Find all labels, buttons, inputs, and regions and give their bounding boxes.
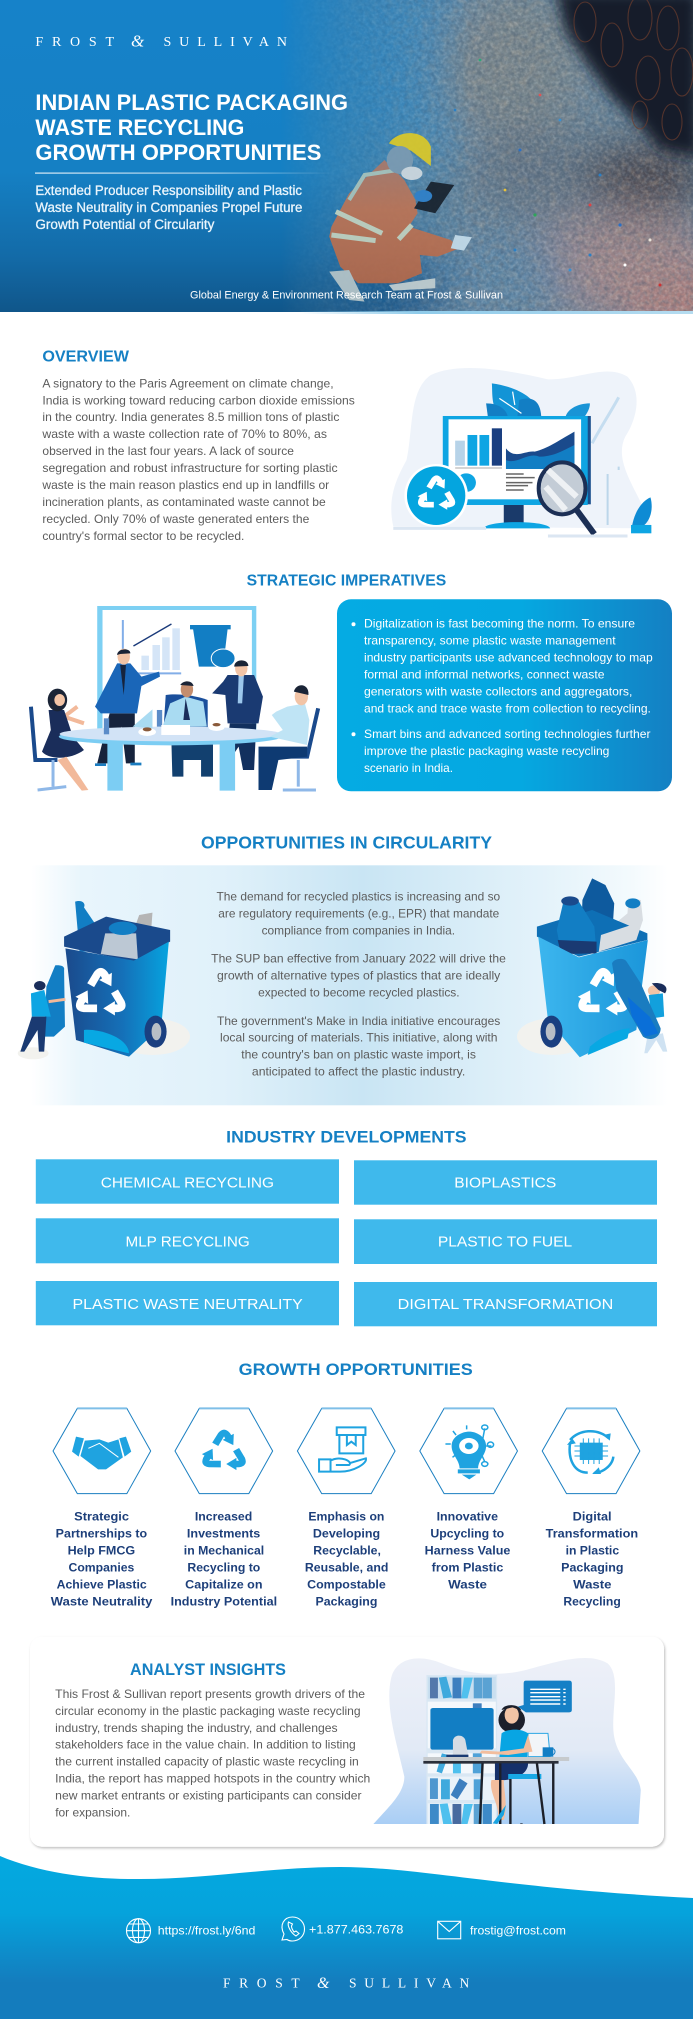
label: Developing: [313, 1527, 380, 1541]
subtitle: Growth Potential of Circularity: [35, 217, 215, 232]
overview body text: [41, 376, 355, 543]
icon: envelope: [438, 1921, 461, 1939]
panel: industry developments: [36, 1127, 657, 1326]
phone number: +1.877.463.7678: [309, 1923, 404, 1937]
icon: handshake in hexagon: [53, 1408, 151, 1494]
label: [546, 1510, 638, 1609]
panel: growth opportunities: [51, 1360, 640, 1609]
speech bubble: [518, 1681, 572, 1712]
panel: opportunities in circularity: [18, 833, 668, 1105]
label: from Plastic: [432, 1561, 504, 1575]
analyst body text: stakeholders face in the value chain. In addition to listing: [55, 1738, 356, 1752]
tile: chemical recycling: [36, 1159, 339, 1204]
label: Help FMCG: [68, 1544, 135, 1558]
desk and legs: [423, 1757, 569, 1761]
standing man right: [212, 660, 263, 770]
column: mechanical recycling: [171, 1408, 277, 1609]
callout panel with bullets: improve the plastic packaging waste recycling: [364, 744, 609, 758]
overview body text: country's formal sector to be recycled.: [42, 529, 244, 543]
research team credit: Global Energy & Environment Research Team at Frost & Sullivan: [190, 289, 503, 301]
analyst body text: new market entrants or existing participants can consider: [55, 1789, 362, 1803]
callout panel with bullets: scenario in India.: [364, 761, 453, 775]
subtitle: Extended Producer Responsibility and Plastic: [35, 183, 302, 198]
overview body text: observed in the last four years. A lack of source: [42, 444, 294, 458]
overview body text: waste with a waste collection rate of 70% to 80%, as: [41, 427, 327, 441]
heading: growth opportunities: GROWTH OPPORTUNITIES: [239, 1360, 473, 1379]
opportunities text: growth of alternative types of plastics that are ideally: [217, 969, 500, 983]
subtitle: Waste Neutrality in Companies Propel Future: [35, 200, 302, 215]
analyst body text: circular economy in the plastic packaging waste recycling: [55, 1704, 361, 1718]
logo: footer Frost & Sullivan: &: [317, 1975, 330, 1992]
tile: plastic to fuel: PLASTIC TO FUEL: [438, 1234, 572, 1251]
coloured bottle caps: [454, 59, 662, 286]
recycle badge: [404, 464, 468, 527]
monitor: [504, 505, 524, 527]
opportunities text: the country's ban on plastic waste import, is: [241, 1048, 476, 1062]
label: Harness Value: [425, 1544, 511, 1558]
label: Reusable, and: [305, 1561, 388, 1575]
analyst body text: This Frost & Sullivan report presents growth drivers of the: [55, 1687, 365, 1701]
chair back and mug: [528, 1733, 550, 1757]
logo: Frost & Sullivan: &: [131, 32, 145, 50]
heading: strategic imperatives: STRATEGIC IMPERATIVES: [247, 572, 447, 589]
label: Packaging: [561, 1561, 624, 1575]
opportunities text: The government's Make in India initiative encourages: [217, 1014, 500, 1028]
tile: plastic to fuel: [354, 1219, 657, 1264]
label: Waste Neutrality: [51, 1595, 153, 1609]
tile: plastic waste neutrality: PLASTIC WASTE NEUTRALITY: [72, 1296, 303, 1313]
column: digital transformation: [542, 1408, 640, 1609]
label: Strategic: [74, 1510, 129, 1524]
tile: MLP recycling: [36, 1218, 339, 1263]
analyst body text: the current installed capacity of plastic waste recycling in: [55, 1755, 359, 1769]
icon: light bulb with gear in hexagon: [420, 1408, 517, 1494]
overview body text: A signatory to the Paris Agreement on climate change,: [42, 376, 334, 390]
photo: plastic bottle waste: [294, 0, 693, 312]
label: Partnerships to: [56, 1527, 147, 1541]
label: Upcycling to: [430, 1527, 504, 1541]
logo: footer Frost & Sullivan: FROST: [223, 1976, 300, 1991]
website link: https://frost.ly/6nd: [158, 1924, 255, 1938]
opportunities text: [211, 890, 506, 1079]
overview body text: incineration plants, as contaminated waste cannot be: [42, 495, 326, 509]
tile: bioplastics: [354, 1160, 657, 1205]
opportunities text: The demand for recycled plastics is increasing and so: [216, 890, 501, 904]
man seated right: [259, 685, 318, 790]
illustration: business meeting: [31, 606, 318, 791]
heading: industry developments: INDUSTRY DEVELOPMENTS: [226, 1127, 467, 1146]
label: Increased: [195, 1510, 252, 1524]
analyst body text: industry, trends shaping the industry, and challenges: [55, 1721, 338, 1735]
seated man: [163, 681, 213, 777]
opportunities text: local sourcing of materials. This initiative, along with: [220, 1031, 498, 1045]
label: [425, 1510, 511, 1592]
opportunities text: compliance from companies in India.: [262, 924, 455, 938]
column: recyclable packaging: [297, 1408, 395, 1609]
label: Compostable: [307, 1578, 386, 1592]
heading: opportunities in circularity: OPPORTUNITIES IN CIRCULARITY: [201, 833, 492, 853]
analyst body text: for expansion.: [55, 1806, 130, 1820]
label: [51, 1510, 153, 1609]
label: [171, 1510, 277, 1609]
label: Transformation: [546, 1527, 638, 1541]
label: Investments: [187, 1527, 261, 1541]
icon: globe: [126, 1919, 150, 1943]
panel: analyst insights: [30, 1637, 664, 1847]
label: Emphasis on: [308, 1510, 384, 1524]
illustration: left recycling bin with person: [18, 901, 190, 1059]
overview body text: recycled. Only 70% of waste generated enters the: [42, 512, 310, 526]
callout panel with bullets: Digitalization is fast becoming the norm. To ensure: [364, 617, 635, 631]
label: Achieve Plastic: [57, 1578, 147, 1592]
title: INDIAN PLASTIC PACKAGING: [35, 90, 348, 115]
label: Capitalize on: [185, 1578, 262, 1592]
opportunities text: The SUP ban effective from January 2022 will drive the: [211, 952, 506, 966]
callout panel with bullets: Smart bins and advanced sorting technologies further: [364, 727, 650, 741]
heading: analyst insights: ANALYST INSIGHTS: [130, 1660, 286, 1679]
plant: [632, 497, 652, 527]
woman at left: [31, 689, 88, 791]
callout panel with bullets: transparency, some plastic waste management: [364, 634, 616, 648]
title: [35, 90, 348, 165]
label: Companies: [68, 1561, 135, 1575]
overview body text: in the country. India generates 8.5 million tons of plastic: [42, 410, 339, 424]
magnifier: [577, 510, 594, 534]
title: WASTE RECYCLING: [35, 115, 244, 140]
column: strategic partnerships: [51, 1408, 153, 1609]
illustration: monitor with charts, recycle badge and magnifier: [391, 368, 652, 536]
dark netting top right: [556, 0, 693, 158]
logo: Frost & Sullivan: FROST: [35, 35, 114, 50]
email address: frostig@frost.com: [470, 1924, 566, 1938]
label: Recyclable,: [313, 1544, 381, 1558]
tile: chemical recycling: CHEMICAL RECYCLING: [101, 1174, 274, 1191]
tile: bioplastics: BIOPLASTICS: [454, 1174, 556, 1191]
icon: recycle in hexagon: [175, 1408, 273, 1494]
label: Waste: [573, 1578, 612, 1592]
label: Recycling: [563, 1595, 621, 1609]
overview body text: segregation and robust infrastructure for sorting plastic: [42, 461, 338, 475]
hero banner: [0, 0, 693, 314]
logo: Frost & Sullivan: [35, 32, 287, 50]
analyst body text: India, the report has mapped hotspots in the country which: [55, 1772, 370, 1786]
monitor: [430, 1708, 494, 1750]
opportunities text: expected to become recycled plastics.: [258, 986, 460, 1000]
bookshelf: [426, 1675, 497, 1824]
overview body text: waste is the main reason plastics end up in landfills or: [41, 478, 329, 492]
panel: strategic imperatives: [31, 572, 672, 791]
person with bottle: [648, 985, 660, 996]
callout panel with bullets: industry participants use advanced technology to map: [364, 651, 653, 665]
logo: footer Frost & Sullivan: [223, 1975, 470, 1992]
tile: plastic waste neutrality: [36, 1281, 339, 1325]
panel: overview: [41, 349, 652, 543]
leaves: [492, 383, 538, 420]
label: Digital: [573, 1510, 612, 1524]
analyst body text: [55, 1687, 370, 1820]
person with bottle: [44, 965, 65, 1037]
logo: footer Frost & Sullivan: SULLIVAN: [349, 1976, 470, 1991]
icon: box on hand in hexagon: [297, 1408, 395, 1494]
label: Waste: [448, 1578, 487, 1592]
footer: [0, 1856, 693, 2019]
label: [305, 1510, 388, 1609]
heading: overview: OVERVIEW: [42, 349, 130, 366]
illustration: woman at desk with bookshelf: [373, 1658, 641, 1824]
opportunities text: are regulatory requirements (e.g., EPR) that mandate: [218, 907, 500, 921]
overview body text: India is working toward reducing carbon dioxide emissions: [42, 393, 355, 407]
woman: [498, 1707, 525, 1733]
tile: MLP recycling: MLP RECYCLING: [126, 1234, 250, 1251]
presenter: [95, 649, 160, 766]
label: Packaging: [316, 1595, 377, 1609]
column: innovative upcycling: [420, 1408, 517, 1592]
subtitle: [35, 183, 302, 232]
label: Industry Potential: [171, 1595, 277, 1609]
tile: digital transformation: DIGITAL TRANSFORMATION: [398, 1296, 613, 1313]
callout panel with bullets: [337, 599, 672, 791]
callout panel with bullets: generators with waste collectors and aggregators,: [364, 685, 632, 699]
title: GROWTH OPPORTUNITIES: [35, 140, 321, 165]
worker in orange coveralls: [329, 133, 472, 302]
label: Recycling to: [187, 1561, 260, 1575]
callout panel with bullets: and track and trace waste from collection to recycling.: [364, 702, 651, 716]
illustration: right recycling bin with person: [517, 878, 667, 1057]
logo: Frost & Sullivan: SULLIVAN: [164, 35, 287, 50]
label: Innovative: [437, 1510, 498, 1524]
icon: chip with cycle arrows in hexagon: [542, 1408, 640, 1494]
opportunities text: anticipated to affect the plastic industry.: [252, 1065, 465, 1079]
callout panel with bullets: formal and informal networks, connect waste: [364, 668, 605, 682]
icon: phone: [282, 1917, 304, 1941]
tile: digital transformation: [354, 1282, 657, 1326]
table: [107, 740, 235, 791]
label: in Mechanical: [184, 1544, 264, 1558]
label: in Plastic: [566, 1544, 619, 1558]
